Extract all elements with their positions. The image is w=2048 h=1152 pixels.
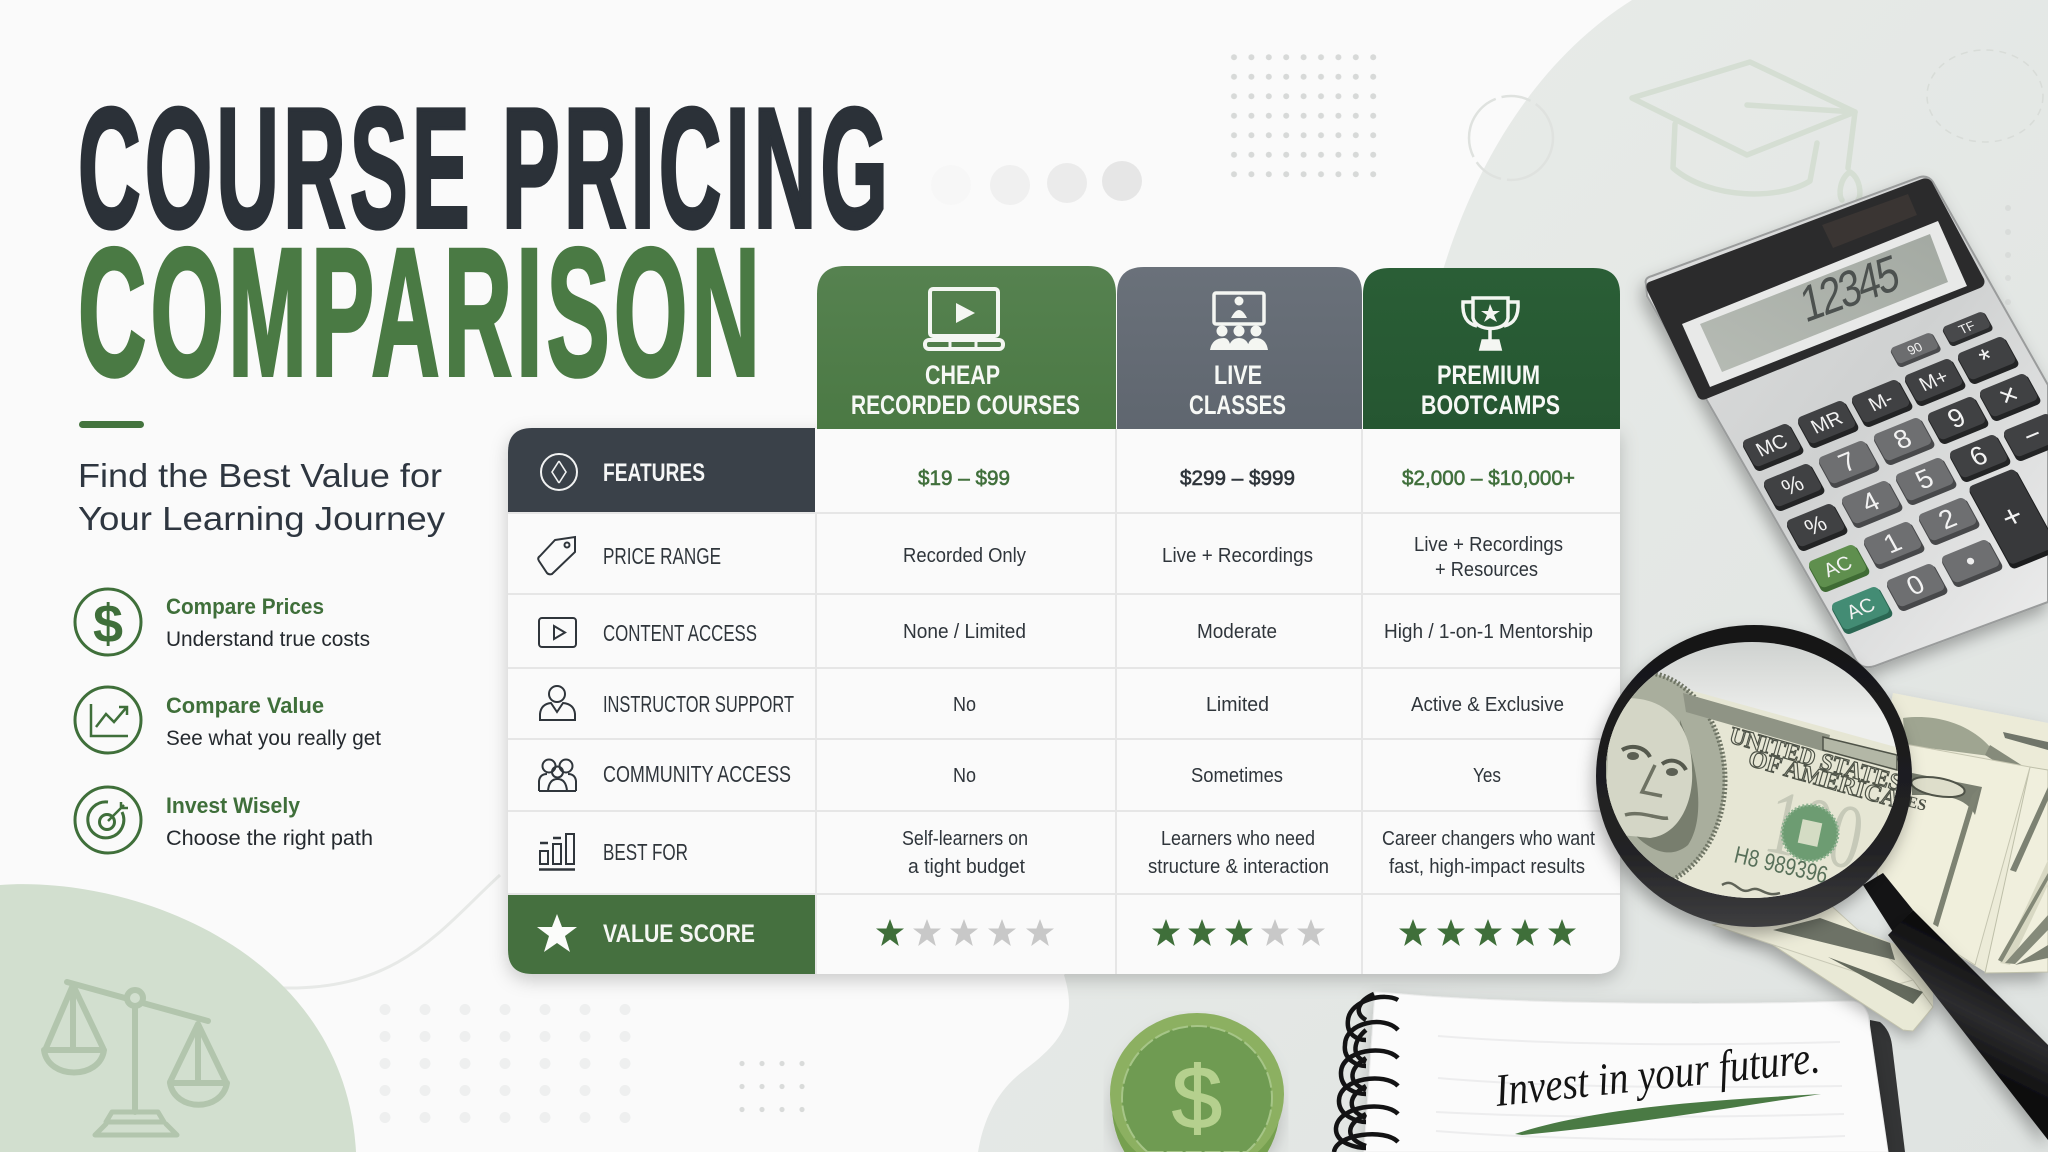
row: content access [539, 618, 1593, 647]
portrait oval [1555, 672, 1725, 888]
key 8: 8 [1888, 423, 1917, 455]
key MR [1798, 401, 1858, 448]
spiral binding [1334, 994, 1398, 1152]
icon: trophy [1463, 298, 1518, 349]
notebook page [1364, 992, 1888, 1152]
icon: person [540, 686, 575, 720]
front bill corner band [1912, 773, 1982, 815]
icon: video [539, 618, 576, 647]
title rule [79, 421, 144, 428]
column header: premium bootcamps: PREMIUM [1437, 360, 1540, 390]
stars: premium 5 of 5 [1399, 919, 1576, 946]
icon: white star [537, 914, 577, 952]
row: features header: $2,000 – $10,000+ [1402, 467, 1575, 490]
row: best for: Self-learners on [902, 828, 1028, 850]
lens glass background [1606, 642, 1898, 898]
row: price range [538, 534, 1563, 581]
icon: laptop play [925, 289, 1003, 349]
title [78, 73, 892, 414]
row: price range: + Resources [1435, 559, 1538, 581]
front bill border [1933, 787, 1980, 927]
title: COURSE PRICING [78, 73, 892, 264]
stars: live 3 of 5 [1152, 919, 1325, 946]
icon: features compass [541, 454, 577, 490]
key small tf: TF [1956, 318, 1978, 337]
row: features header: $299 – $999 [1180, 467, 1295, 490]
key MC: MC [1752, 430, 1792, 462]
icon: dollar circle: $ [93, 594, 123, 654]
coin: $ [1172, 1048, 1222, 1147]
key 7: 7 [1833, 446, 1862, 478]
key 4: 4 [1856, 486, 1885, 518]
lcd screen [1700, 234, 1948, 372]
key M- [1852, 380, 1912, 427]
row: features header: $19 – $99 [918, 467, 1010, 490]
lens contents: bill [1606, 672, 1898, 898]
row: instructor support: Limited [1206, 694, 1269, 716]
column header: cheap recorded courses: RECORDED COURSES [851, 390, 1080, 420]
lens contents: bill: OF AMERICA [1745, 746, 1902, 814]
decorative dot grid: top [1225, 48, 1382, 184]
key percent 2 [1787, 504, 1848, 551]
key minus [2004, 414, 2048, 461]
notebook back cover [1870, 1020, 1905, 1152]
lens rim [1596, 625, 1912, 927]
key percent [1764, 464, 1824, 511]
handwritten text: Invest in your future. [1492, 1031, 1822, 1116]
row: features header: FEATURES [603, 459, 705, 487]
list: invest wisely: Invest Wisely [166, 793, 301, 818]
calculator top panel [1646, 178, 1984, 400]
row: best for: BEST FOR [603, 839, 688, 865]
key 1 [1864, 522, 1924, 569]
key 2 [1919, 498, 1980, 545]
table grid [508, 429, 1620, 974]
list: compare prices [75, 589, 370, 655]
key 9 [1928, 397, 1988, 444]
key small 90: 90 [1904, 339, 1925, 358]
row: instructor support [540, 686, 1564, 720]
icon: tag [538, 537, 575, 574]
magnifying glass [1550, 625, 2048, 1140]
back bills [1880, 693, 2048, 973]
row: value score [508, 895, 1576, 974]
key AC teal [1832, 587, 1892, 634]
column header: cheap recorded courses [817, 266, 1116, 429]
money stack [1713, 693, 2048, 1031]
key M+ [1905, 359, 1966, 406]
row: content access: CONTENT ACCESS [603, 620, 757, 646]
list: compare prices: Compare Prices [166, 594, 324, 619]
row: community access [539, 760, 1501, 791]
bill ornamental band [1683, 693, 1830, 752]
bill serial: H8 989396 [1732, 842, 1830, 889]
notebook [1334, 992, 1905, 1152]
row: content access: Moderate [1197, 621, 1277, 643]
column header: premium bootcamps: BOOTCAMPS [1421, 390, 1560, 420]
row: community access: Yes [1473, 765, 1501, 787]
subtitle: Your Learning Journey [78, 500, 446, 537]
key minus: − [2018, 419, 2047, 451]
row: best for: Career changers who want [1382, 828, 1595, 850]
row: instructor support: INSTRUCTOR SUPPORT [603, 691, 794, 717]
row: price range: Recorded Only [903, 545, 1026, 567]
icon: balance scale watermark [44, 982, 227, 1135]
key 9: 9 [1942, 402, 1971, 434]
stars: cheap 1 of 5 [876, 919, 1054, 946]
column header: cheap recorded courses: CHEAP [925, 360, 1000, 390]
subtitle [78, 457, 446, 537]
key percent: % [1777, 470, 1808, 500]
key 0: 0 [1901, 569, 1930, 601]
key percent 2: % [1800, 510, 1831, 540]
column header: live classes [1117, 267, 1362, 429]
bill signature [1722, 883, 1780, 894]
row: community access: No [953, 765, 976, 787]
title: COMPARISON [78, 210, 764, 414]
list: invest wisely: Choose the right path [166, 827, 373, 850]
key plus: + [1995, 497, 2029, 536]
icon: target circle [75, 787, 141, 853]
row: content access: None / Limited [903, 621, 1026, 643]
key MC [1743, 424, 1804, 471]
key M-: M- [1865, 388, 1897, 416]
key 5 [1896, 458, 1956, 505]
key 6: 6 [1964, 440, 1993, 472]
fanned bills [1985, 767, 2048, 973]
list: compare value: Compare Value [166, 693, 324, 718]
key 1: 1 [1878, 527, 1907, 559]
row: price range: Live + Recordings [1162, 545, 1313, 567]
bill big 100: 100 [1758, 770, 1872, 889]
calculator [1646, 177, 2048, 667]
column header: premium bootcamps [1363, 268, 1620, 429]
comparison table [508, 266, 1620, 974]
solar strip [1822, 194, 1917, 248]
row: price range: Live + Recordings [1414, 534, 1563, 556]
bill corner 100 [1823, 737, 1897, 770]
icon: graduation cap watermark [1632, 62, 1860, 200]
front bill [1875, 744, 2030, 965]
list: compare prices: Understand true costs [166, 628, 370, 651]
bill text: UNITED STATES [1726, 723, 1905, 797]
coin [1110, 1013, 1284, 1152]
key MR: MR [1807, 407, 1847, 439]
key 7 [1819, 441, 1880, 488]
key AC green: AC [1820, 552, 1856, 582]
row: community access: COMMUNITY ACCESS [603, 761, 791, 787]
lcd digits: 12345 [1796, 244, 1902, 334]
decorative green circle bottom-left [0, 884, 356, 1152]
key AC teal: AC [1843, 594, 1879, 624]
icon: dollar circle [75, 589, 141, 655]
list: invest wisely [75, 787, 373, 853]
decorative dashed circles [1469, 50, 2043, 180]
key AC green [1809, 545, 1870, 592]
calculator body [1646, 177, 2048, 667]
green brush underline [1515, 1094, 1821, 1135]
decorative wave and dots bottom-left [283, 875, 812, 1131]
lower bills [1713, 905, 1933, 1031]
key star [1958, 337, 2018, 384]
row: instructor support: Active & Exclusive [1411, 694, 1564, 716]
decorative dots right [2005, 205, 2011, 305]
front bill letters: ES [1905, 793, 1928, 815]
row: instructor support: No [953, 694, 976, 716]
icon: live class [1210, 293, 1268, 350]
decorative circles: top [931, 161, 1142, 205]
portrait face [1605, 698, 1692, 838]
key small 90 [1890, 333, 1941, 367]
bill seal [1782, 805, 1838, 861]
display bezel [1682, 221, 1967, 387]
key small tf [1942, 312, 1992, 346]
row: value score: VALUE SCORE [603, 920, 755, 948]
table card [508, 428, 1620, 974]
key star: * [1974, 343, 2001, 376]
key 5: 5 [1910, 463, 1939, 495]
column header: live classes: LIVE [1214, 360, 1262, 390]
row: features header [508, 428, 1575, 512]
row: best for: Learners who need [1161, 828, 1315, 850]
key times [1980, 374, 2040, 421]
column header: live classes: CLASSES [1189, 390, 1286, 420]
list: compare value: See what you really get [166, 727, 381, 750]
row: content access: High / 1-on-1 Mentorship [1384, 621, 1593, 643]
portrait hair [1635, 720, 1698, 852]
key 6 [1950, 435, 2010, 482]
icon: chart circle [75, 687, 141, 753]
row: price range: PRICE RANGE [603, 543, 721, 569]
row: best for: a tight budget [908, 856, 1025, 878]
handle [1863, 873, 2048, 1140]
icon: bars [539, 834, 575, 870]
key dot [1942, 540, 2002, 587]
key times: × [1993, 378, 2025, 413]
background blob: right side [978, 0, 2048, 1152]
list: compare value [75, 687, 381, 753]
subtitle: Find the Best Value for [78, 457, 442, 494]
front bill oval [1910, 773, 1966, 801]
key plus [1967, 468, 2048, 570]
back portrait band [1903, 717, 1997, 757]
icon: community [539, 760, 576, 791]
row: best for: fast, high-impact results [1389, 856, 1585, 878]
key M+: M+ [1916, 366, 1952, 396]
key 4 [1842, 481, 1902, 528]
key 8 [1874, 418, 1934, 465]
key 0 [1887, 564, 1948, 611]
bill bands [1773, 918, 1895, 960]
row: best for [539, 828, 1595, 878]
row: best for: structure & interaction [1148, 856, 1329, 878]
notebook ruled lines [1436, 1036, 1845, 1139]
row: community access: Sometimes [1191, 765, 1283, 787]
key 2: 2 [1933, 503, 1962, 535]
